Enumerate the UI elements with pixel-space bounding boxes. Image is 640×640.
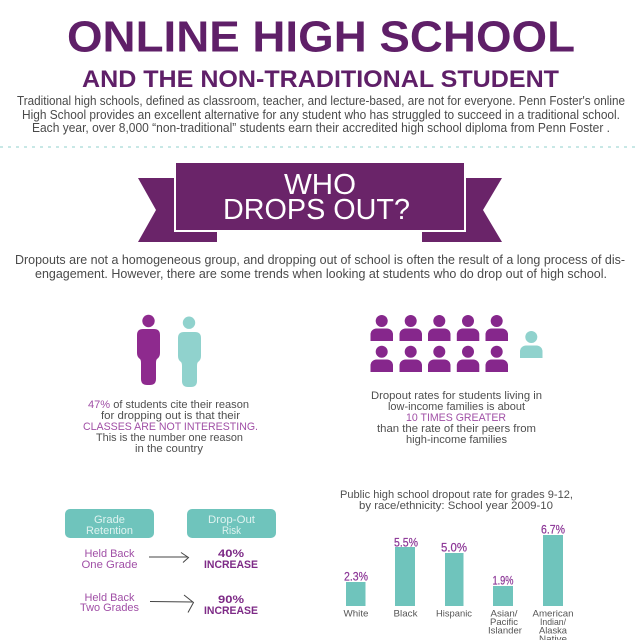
bar: black — [394, 536, 418, 620]
bar: white — [344, 570, 368, 620]
bar: asian pacific islander: 1.9% — [492, 574, 514, 588]
text: low-income dropout rates: than the rate of their peers from — [377, 423, 536, 435]
ribbon banner: who drops out — [138, 162, 502, 242]
arrow: one grade to 40 percent — [149, 552, 188, 562]
dropout description text: Dropouts are not a homogeneous group, and dropping out of school is often the result of a long process of dis- — [15, 253, 625, 267]
value: 90 percent increase: 90% — [218, 594, 244, 606]
header box: drop-out risk: Risk — [222, 525, 241, 537]
text: low-income dropout rates: low-income families is about — [388, 401, 525, 413]
bar: hispanic: 5.0% — [441, 540, 467, 554]
value: 90 percent increase — [204, 594, 258, 617]
label: held back two grades: Two Grades — [80, 602, 139, 614]
text: classes not interesting: in the country — [135, 443, 204, 455]
text: low-income dropout rates — [371, 390, 542, 446]
bar: white: White — [344, 608, 368, 620]
text: classes not interesting: for dropping out is that their — [101, 410, 240, 422]
bar: asian pacific islander: Pacific — [490, 617, 518, 628]
header box: drop-out risk — [187, 509, 276, 538]
header box: drop-out risk: Drop-Out — [208, 514, 255, 526]
title: ONLINE HIGH SCHOOL — [67, 12, 575, 62]
chart title: Public high school dropout rate for grades 9-12, — [340, 489, 573, 501]
text: low-income dropout rates: Dropout rates for students living in — [371, 390, 542, 402]
text: classes not interesting — [83, 399, 258, 455]
ribbon banner: who drops out: DROPS OUT? — [223, 194, 410, 226]
bar: american indian alaska native — [532, 522, 574, 640]
icon: two standing figures — [137, 315, 201, 387]
value: 40 percent increase — [204, 548, 258, 571]
bar: hispanic — [436, 540, 472, 620]
label: held back one grade: One Grade — [82, 559, 138, 571]
text: low-income dropout rates: 10 TIMES GREATER — [406, 412, 506, 424]
header box: grade retention — [65, 509, 154, 538]
label: held back one grade: Held Back — [84, 548, 135, 560]
bar: asian pacific islander: Asian/ — [490, 608, 518, 620]
chart title: by race/ethnicity: School year 2009-10 — [359, 500, 553, 512]
text: low-income dropout rates: high-income families — [406, 434, 508, 446]
bar: american indian alaska native: Indian/ — [540, 617, 566, 628]
header box: grade retention: Retention — [86, 525, 133, 537]
bar: asian pacific islander: Islander — [488, 626, 522, 636]
label: held back two grades: Held Back — [84, 592, 135, 604]
bar: american indian alaska native: 6.7% — [541, 522, 565, 536]
ribbon banner: who drops out: WHO — [284, 169, 356, 201]
text: classes not interesting: This is the number one reason — [96, 432, 243, 444]
bar: american indian alaska native: Alaska — [539, 626, 568, 636]
bar chart: dropout rate by race — [344, 522, 574, 640]
text: classes not interesting: CLASSES ARE NOT INTERESTING. — [83, 421, 258, 433]
value: 40 percent increase: 40% — [218, 548, 244, 560]
bar: asian pacific islander — [488, 574, 522, 636]
value: 90 percent increase: INCREASE — [204, 605, 258, 617]
bar: black: Black — [394, 608, 418, 620]
label: held back two grades — [80, 592, 139, 614]
arrow: two grades to 90 percent — [150, 595, 194, 612]
dropout description text — [15, 253, 625, 281]
bar: american indian alaska native: American — [532, 608, 574, 620]
bar: hispanic: Hispanic — [436, 608, 472, 620]
chart title — [340, 489, 573, 512]
text: classes not interesting: 47% of students cite their reason — [88, 399, 249, 411]
subtitle: AND THE NON-TRADITIONAL STUDENT — [82, 66, 559, 93]
intro text — [17, 94, 625, 135]
icon: ten purple figures and one teal figure — [370, 315, 542, 372]
value: 40 percent increase: INCREASE — [204, 559, 258, 571]
header box: grade retention: Grade — [94, 514, 125, 526]
label: held back one grade — [82, 548, 138, 571]
intro text: High School provides an excellent alternative for any student who has struggled to succeed in a traditional school. — [22, 108, 620, 122]
dropout description text: engagement. However, there are some trends when looking at students who do drop out of high school. — [35, 267, 607, 281]
bar: black: 5.5% — [394, 536, 418, 550]
intro text: Each year, over 8,000 “non-traditional” students earn their accredited high school diploma from Penn Foster . — [32, 121, 610, 135]
bar: white: 2.3% — [344, 570, 368, 584]
